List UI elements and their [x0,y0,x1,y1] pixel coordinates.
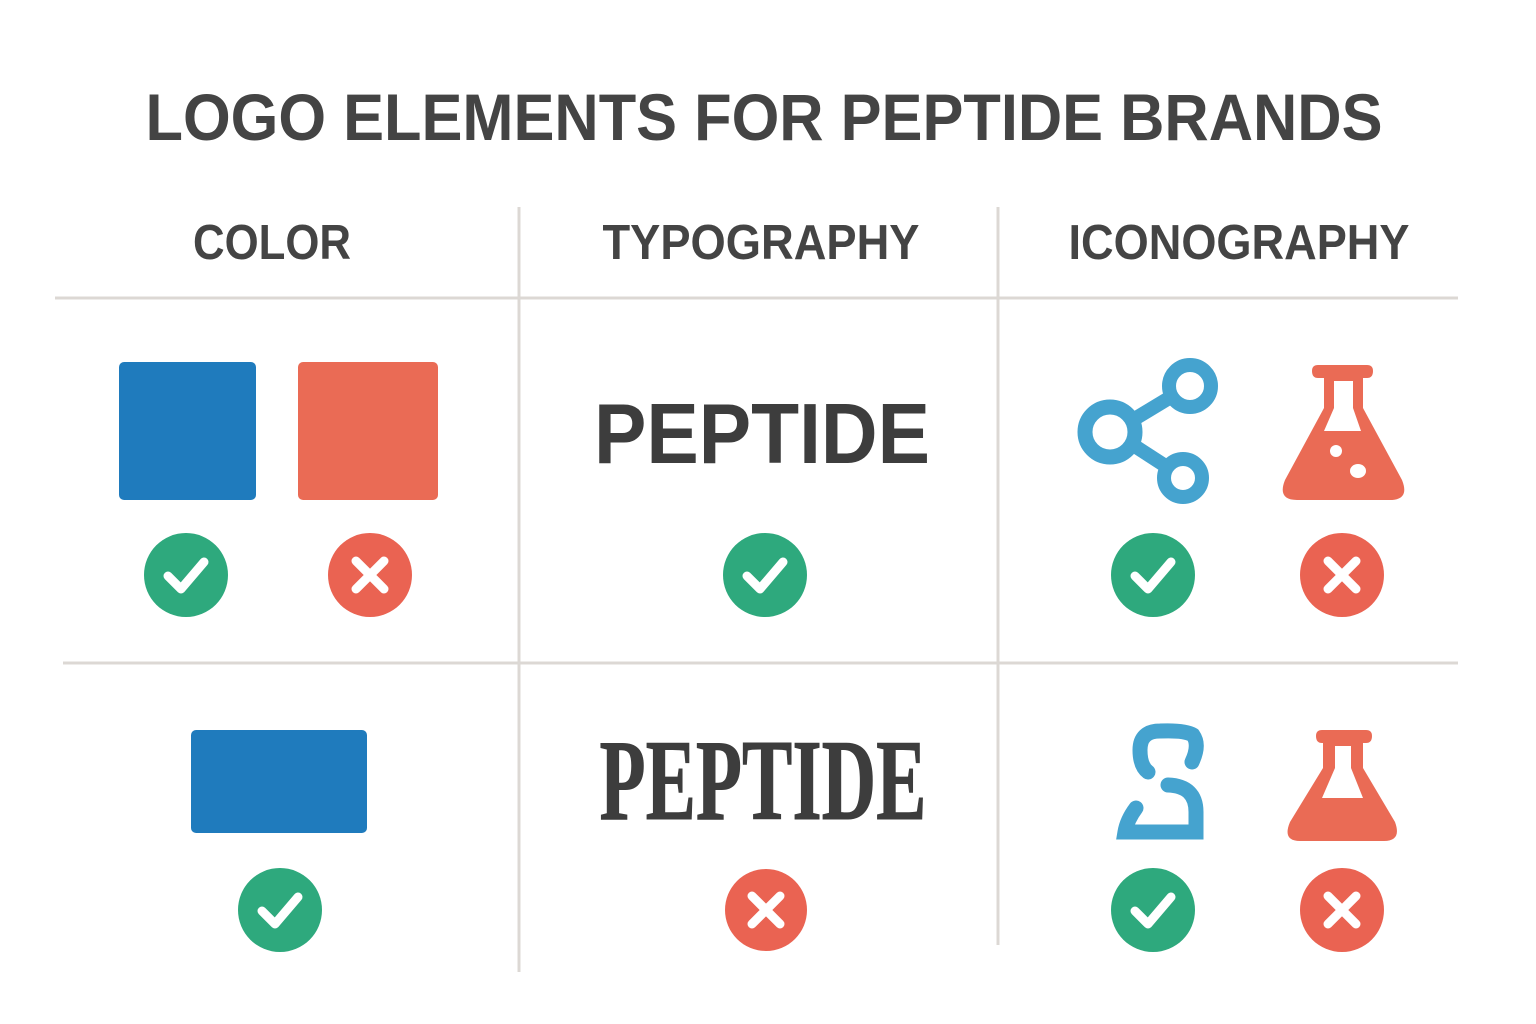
swatch: blue square [119,362,256,500]
text: sans PEPTIDE: PEPTIDE [594,387,930,482]
icon: check typography [723,533,807,617]
icon: plain flask [1288,730,1397,841]
title: LOGO ELEMENTS FOR PEPTIDE BRANDS [146,80,1382,154]
heading: typography: TYPOGRAPHY [602,216,920,270]
heading: iconography: ICONOGRAPHY [1068,216,1410,270]
text: serif PEPTIDE: PEPTIDE [600,717,926,845]
icon: x serif [725,869,807,951]
icon: check share [1111,533,1195,617]
swatch: blue rectangle [191,730,367,833]
swatch: orange square [298,362,438,500]
icon: flask with bubbles [1283,365,1404,500]
icon: check blue rectangle [238,868,322,952]
icon: x flask [1300,533,1384,617]
heading: color: COLOR [193,216,351,270]
icon: abstract S [1125,731,1196,832]
icon: check color blue [144,533,228,617]
icon: x color orange [328,533,412,617]
icon: share molecule [1085,365,1211,497]
icon: check abstract S [1111,868,1195,952]
icon: x plain flask [1300,868,1384,952]
